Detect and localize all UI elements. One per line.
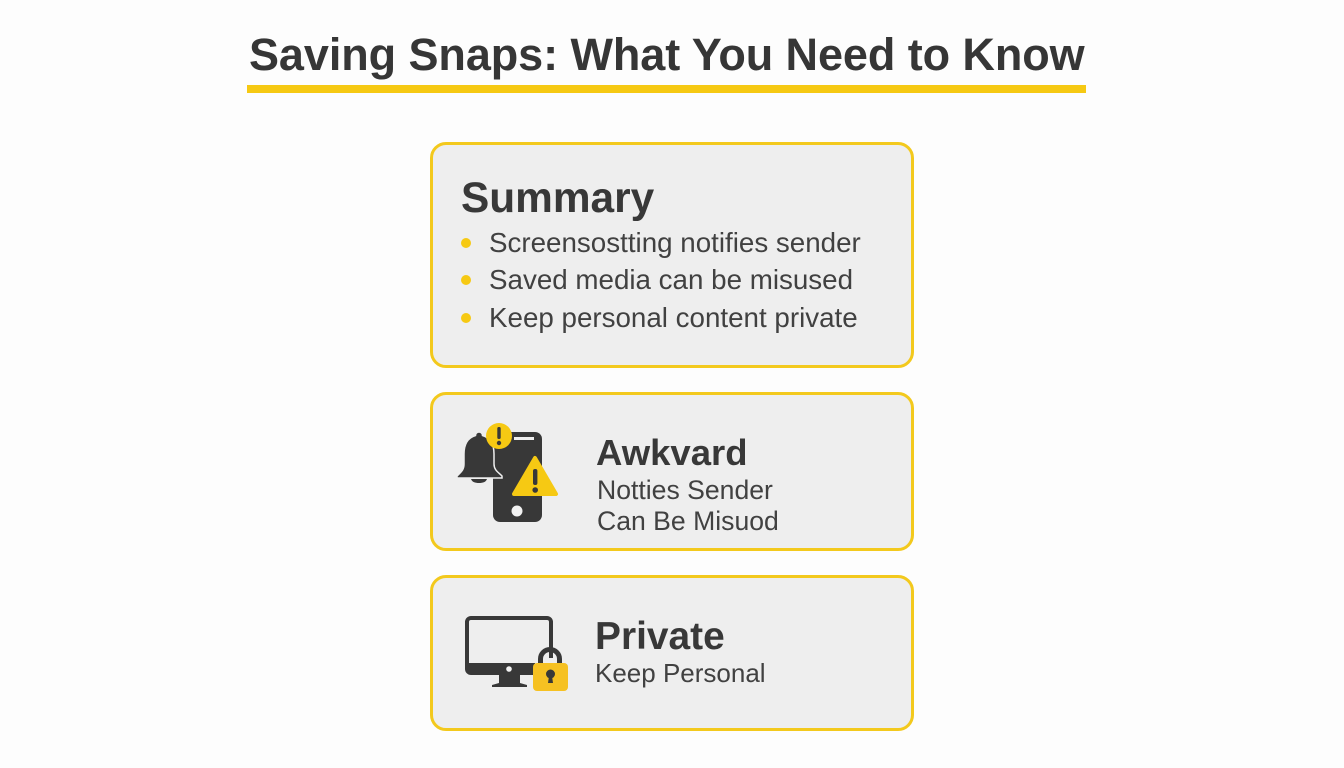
heading: awkward: Awkvard — [596, 432, 748, 473]
panel: awkward — [430, 392, 914, 551]
heading: private: Private — [595, 615, 725, 658]
text: awkward details: Notties Sender — [597, 475, 773, 505]
bullet 3: Keep personal content private — [489, 302, 858, 333]
panel: private — [430, 575, 914, 731]
bullet 2: Saved media can be misused — [489, 264, 853, 295]
title underline — [247, 85, 1086, 93]
icon: phone with bell and warning — [458, 423, 558, 522]
heading: summary: Summary — [461, 174, 654, 221]
icon: monitor with padlock — [465, 616, 568, 691]
text: awkward details — [597, 475, 779, 536]
bullet 1: Screensostting notifies sender — [489, 227, 861, 258]
panel: summary — [430, 142, 914, 368]
text: private details: Keep Personal — [595, 658, 766, 688]
title: Saving Snaps: What You Need to Know — [249, 29, 1085, 80]
text: awkward details: Can Be Misuod — [597, 506, 779, 536]
bullet list — [461, 227, 861, 333]
